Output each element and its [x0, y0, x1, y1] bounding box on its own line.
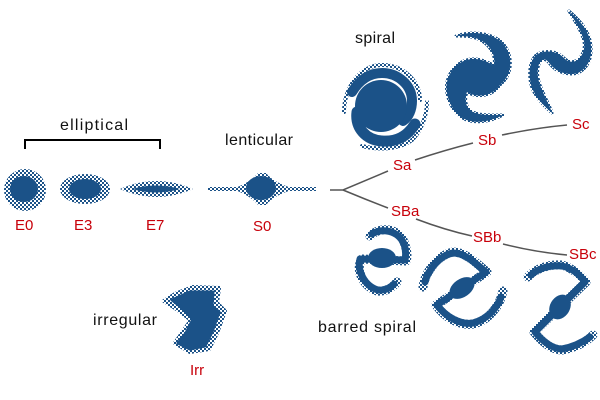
heading: elliptical: elliptical	[60, 117, 128, 134]
galaxy: Irr irregular	[164, 287, 225, 352]
galaxy: SBb barred spiral	[423, 252, 503, 324]
galaxy: SBc barred spiral	[528, 265, 593, 350]
label: E3: E3	[74, 217, 92, 234]
galaxy: E7	[120, 181, 193, 197]
label: S0: S0	[253, 218, 271, 235]
label: Sa: Sa	[393, 157, 412, 174]
label: E0: E0	[15, 217, 33, 234]
galaxy: Sa spiral	[344, 65, 427, 148]
label: Sb: Sb	[478, 132, 496, 149]
label: SBb: SBb	[473, 229, 501, 246]
bracket: elliptical group	[25, 140, 160, 149]
heading: barred spiral: barred spiral	[318, 319, 416, 336]
galaxy: Sb spiral	[447, 33, 510, 122]
heading: spiral: spiral	[355, 30, 395, 47]
tuning fork branches	[330, 125, 567, 255]
heading: lenticular: lenticular	[225, 132, 294, 149]
label: SBc: SBc	[569, 246, 597, 263]
label: E7: E7	[146, 217, 164, 234]
galaxy: SBa barred spiral	[359, 230, 407, 291]
heading: irregular: irregular	[93, 312, 158, 329]
galaxy: S0 lenticular	[208, 173, 316, 205]
galaxy: Sc spiral	[530, 11, 591, 113]
label: SBa: SBa	[391, 203, 420, 220]
galaxy: E0	[4, 169, 46, 211]
label: Irr: Irr	[190, 362, 204, 379]
label: Sc: Sc	[572, 116, 590, 133]
galaxy: E3	[60, 174, 110, 204]
